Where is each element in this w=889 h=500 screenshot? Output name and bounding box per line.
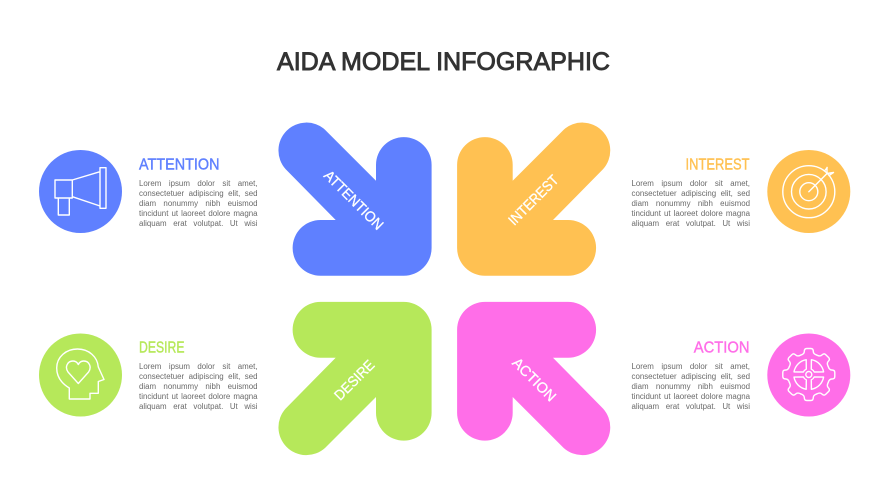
text: attention description: aliquam erat volutpat. Ut wisi xyxy=(139,218,258,228)
panel: attention xyxy=(39,150,258,233)
text: attention description: Lorem ipsum dolor sit amet, xyxy=(139,178,258,188)
arrow: attention: ATTENTION xyxy=(320,168,386,234)
central arrows xyxy=(278,122,610,456)
text: interest description: aliquam erat volutpat. Ut wisi xyxy=(632,218,750,228)
arrow: desire xyxy=(278,302,432,455)
text: action description: tincidunt ut laoreet dolore magna xyxy=(632,392,750,401)
arrow: action: ACTION xyxy=(508,355,559,405)
text: interest description: consectetuer adipiscing elit, sed xyxy=(632,188,750,198)
title: AIDA MODEL INFOGRAPHIC xyxy=(277,48,610,76)
text: action description: aliquam erat volutpat. Ut wisi xyxy=(632,402,750,411)
arrow: interest: INTEREST xyxy=(506,172,562,229)
heading: interest: INTEREST xyxy=(685,156,749,174)
text: action description: diam nonummy nibh euismod xyxy=(632,382,750,391)
arrow: attention xyxy=(278,123,432,276)
icon: gear xyxy=(767,334,850,416)
text: desire description xyxy=(139,362,258,411)
arrow: action xyxy=(457,302,610,455)
text: attention description: diam nonummy nibh euismod xyxy=(139,198,258,208)
text: desire description: tincidunt ut laoreet dolore magna xyxy=(139,392,258,401)
text: action description xyxy=(632,362,750,411)
text: interest description: diam nonummy nibh euismod xyxy=(632,198,750,208)
text: interest description xyxy=(632,178,750,228)
text: attention description xyxy=(139,178,258,228)
heading: action: ACTION xyxy=(693,340,749,357)
arrow: interest xyxy=(457,123,610,276)
text: desire description: diam nonummy nibh euismod xyxy=(139,382,258,391)
text: desire description: Lorem ipsum dolor sit amet, xyxy=(139,362,258,371)
text: action description: Lorem ipsum dolor sit amet, xyxy=(632,362,750,371)
panel: action xyxy=(632,334,850,416)
arrow: desire: DESIRE xyxy=(332,357,379,404)
text: action description: consectetuer adipiscing elit, sed xyxy=(632,372,750,381)
panel: interest xyxy=(632,150,850,233)
heading: attention: ATTENTION xyxy=(139,156,220,174)
text: desire description: consectetuer adipiscing elit, sed xyxy=(139,372,258,381)
text: interest description: tincidunt ut laoreet dolore magna xyxy=(632,208,750,218)
icon: target xyxy=(767,150,850,233)
text: attention description: tincidunt ut laoreet dolore magna xyxy=(139,208,258,218)
text: interest description: Lorem ipsum dolor sit amet, xyxy=(632,178,750,188)
text: attention description: consectetuer adipiscing elit, sed xyxy=(139,188,258,198)
icon: head with heart xyxy=(39,334,122,416)
panel: desire xyxy=(39,334,258,416)
heading: desire: DESIRE xyxy=(139,340,184,357)
icon: megaphone xyxy=(39,150,122,233)
text: desire description: aliquam erat volutpat. Ut wisi xyxy=(139,402,258,411)
